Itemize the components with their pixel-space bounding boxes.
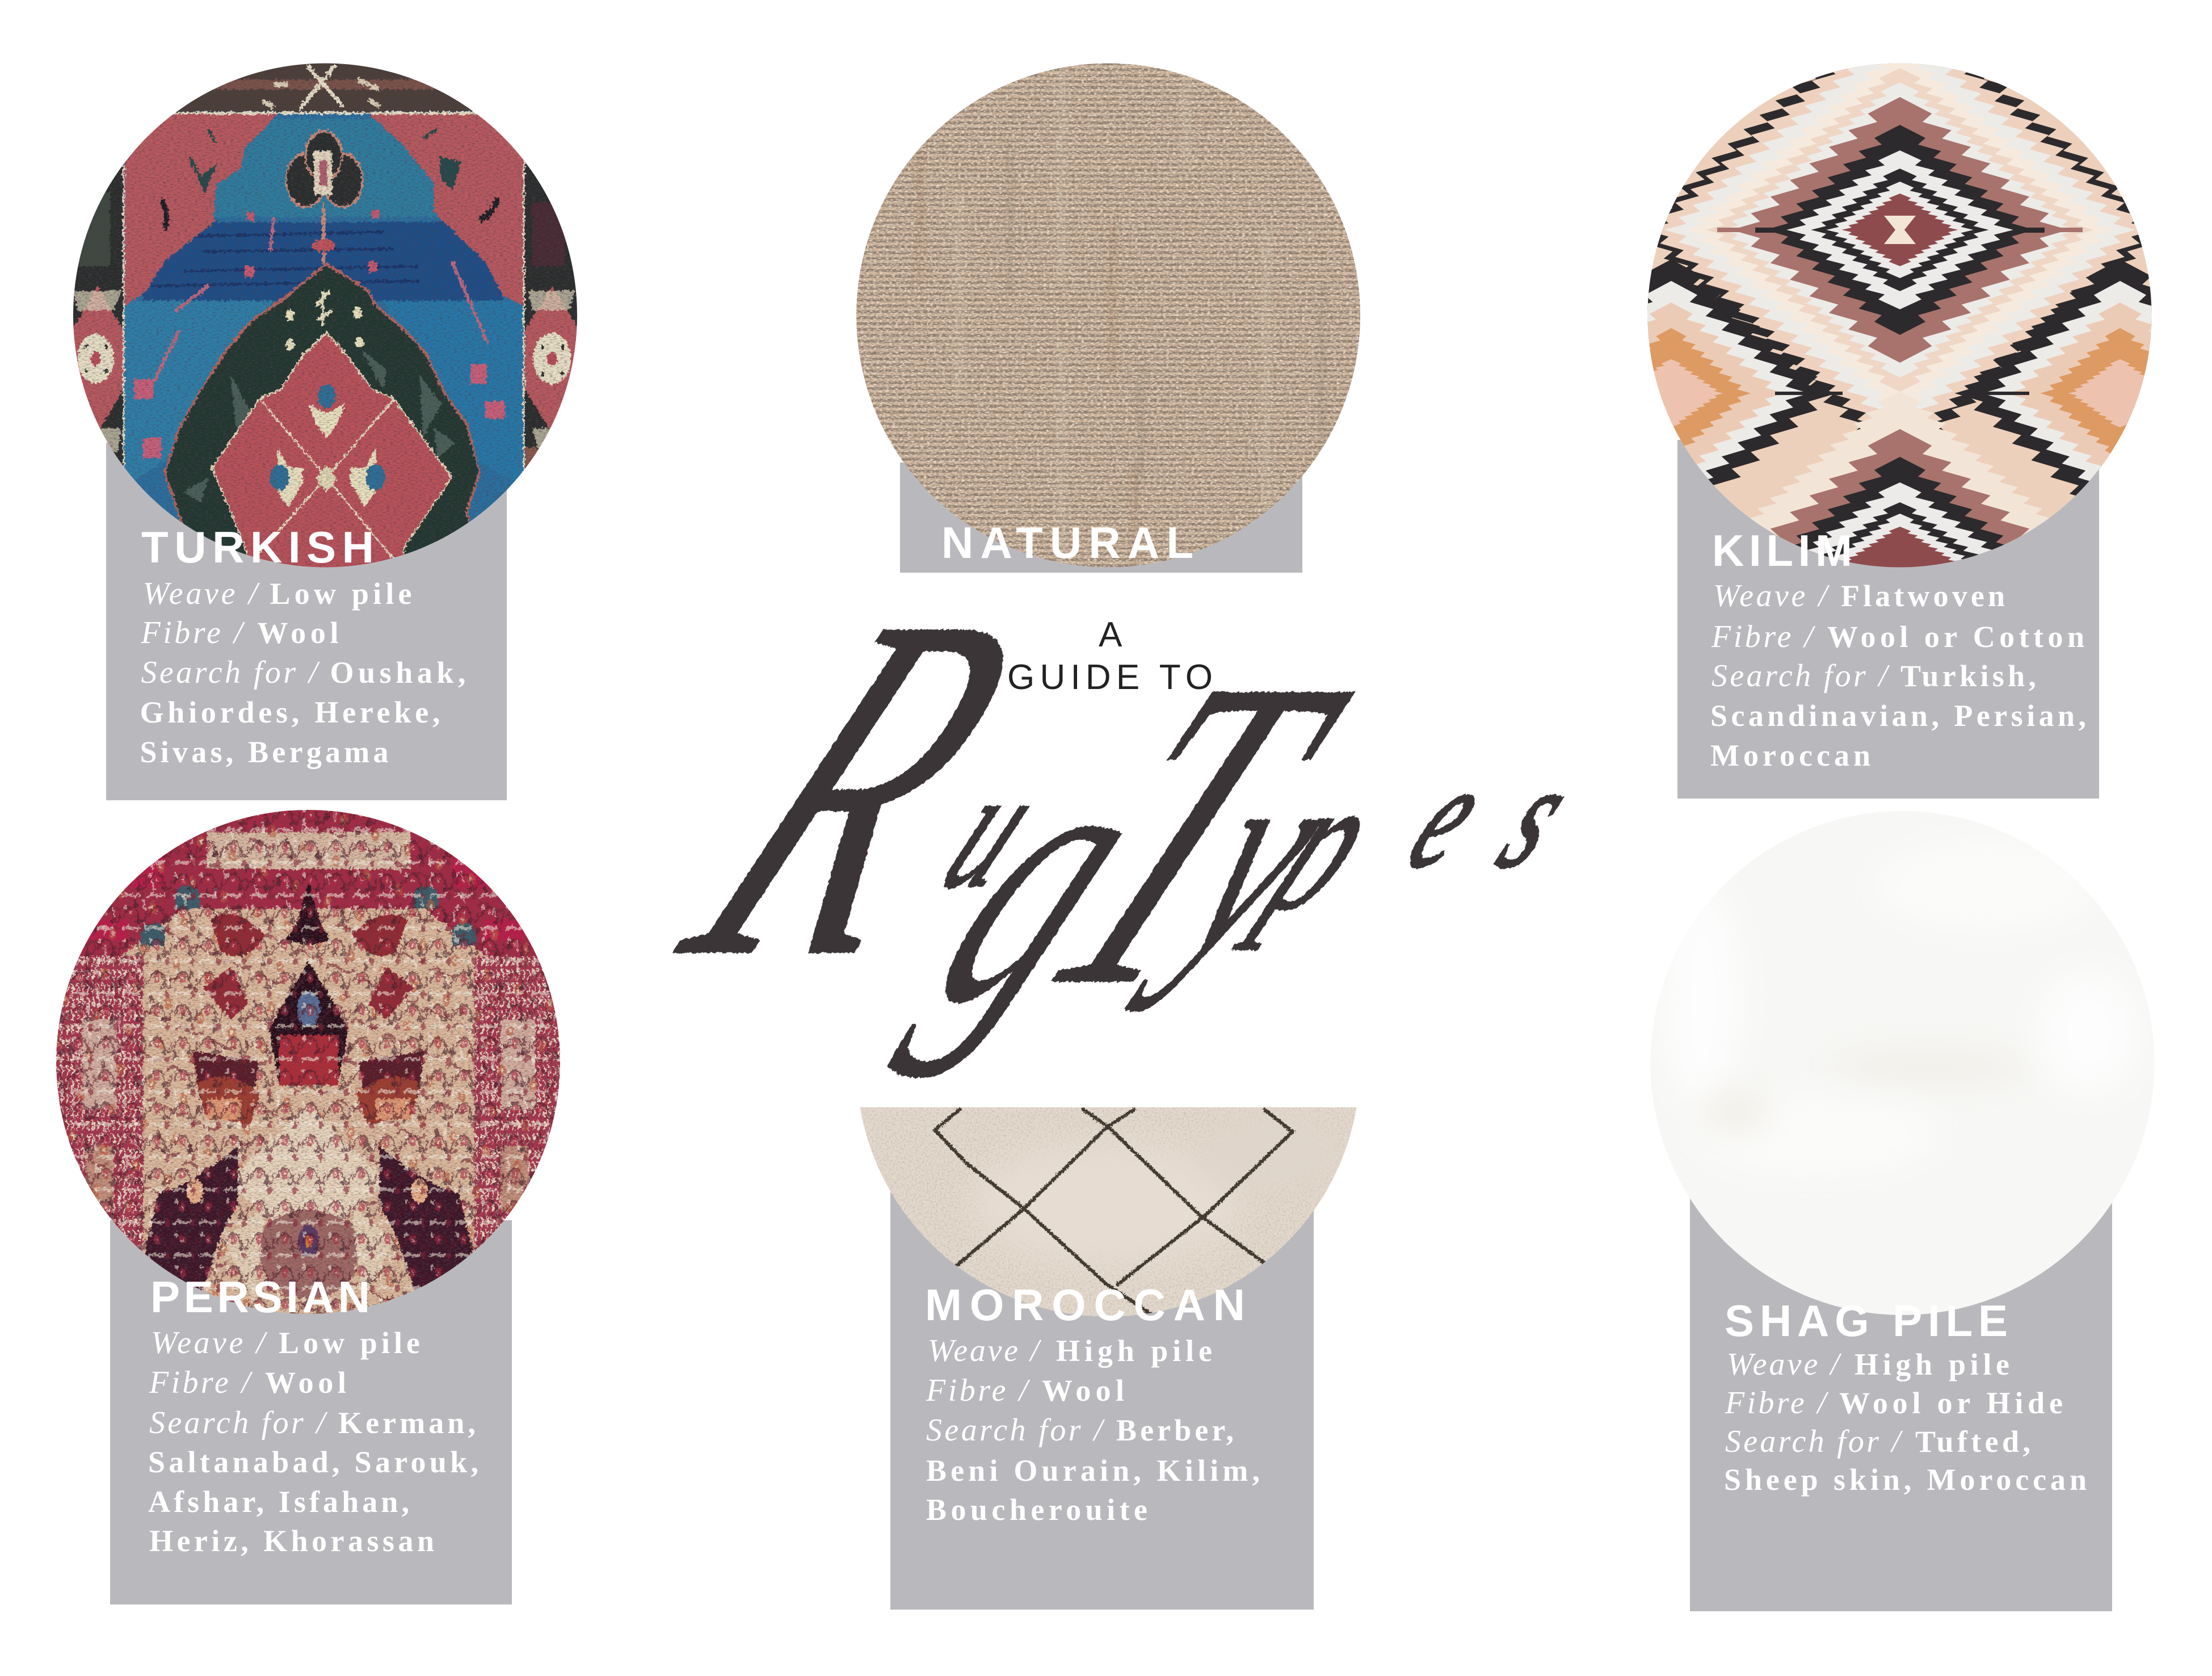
details: Shag pile: Wool or Hide (1839, 1386, 2063, 1420)
title: Rug Types script: R (610, 513, 1103, 1060)
rug image: Natural (851, 60, 1368, 570)
details: Shag pile: Search for / (1725, 1424, 1903, 1459)
main diamond core (1717, 97, 2083, 363)
bottom diamond (1697, 392, 2102, 732)
rug image: Persian (44, 803, 583, 1330)
panel: Persian (44, 803, 583, 1604)
details: Persian: Weave / (151, 1325, 267, 1360)
title: Rug Types script: p (1231, 736, 1416, 950)
info box: Natural (900, 463, 1302, 573)
details: Shag pile: High pile (1854, 1347, 2009, 1381)
panel: Moroccan (851, 1101, 1373, 1610)
title: Rug Types script: g (879, 671, 1218, 1080)
details: Persian: Heriz, Khorassan (149, 1524, 434, 1558)
rug image: Moroccan (851, 1101, 1373, 1328)
details: Persian: Saltanabad, Sarouk, (148, 1445, 478, 1479)
details: Moroccan: Weave / (928, 1333, 1041, 1368)
details: Moroccan: Beni Ourain, Kilim, (926, 1454, 1260, 1488)
rug image: Turkish (73, 64, 577, 568)
details: Persian: Search for / (149, 1405, 327, 1440)
details: Moroccan: Fibre / (926, 1373, 1030, 1408)
details: Turkish: Weave / (143, 576, 260, 611)
rug image: Kilim (1648, 64, 2152, 568)
details: Persian: Fibre / (149, 1365, 253, 1400)
heading: Moroccan: MOROCCAN (925, 1280, 1245, 1330)
title: Guide to: GUIDE TO (1007, 658, 1213, 697)
details: Shag pile (1724, 1347, 2087, 1497)
info box: Turkish (106, 443, 507, 800)
heading: Shag pile: SHAG PILE (1725, 1296, 2008, 1346)
main diamond rings (1632, 0, 2168, 460)
title: Rug Types script: T (974, 587, 1415, 1078)
details: Moroccan: Wool (1042, 1373, 1124, 1408)
details: Turkish: Sivas, Bergama (140, 735, 388, 769)
heading: Persian: PERSIAN (150, 1272, 370, 1322)
details: Kilim: Wool or Cotton (1827, 620, 2084, 654)
details: Shag pile: Tufted, (1915, 1425, 2030, 1459)
panel: Natural (851, 60, 1368, 573)
info box: Persian (110, 1220, 512, 1604)
panel: Kilim (1648, 64, 2152, 799)
details: Persian: Low pile (279, 1326, 420, 1360)
top band and corners (44, 803, 583, 977)
details: Moroccan: Berber, (1116, 1413, 1234, 1447)
title: Rug Types script: y (1121, 698, 1390, 1012)
details: Persian: Wool (265, 1366, 346, 1400)
details: Turkish: Oushak, (330, 656, 465, 690)
details: Kilim: Turkish, (1900, 659, 2036, 693)
title: Rug Types script: e (1384, 734, 1515, 898)
details: Moroccan: High pile (1056, 1334, 1212, 1368)
right diamond (1954, 259, 2212, 527)
details: Kilim: Flatwoven (1841, 579, 2005, 613)
rug image: Shag pile (1646, 806, 2162, 1322)
title: Rug Types script: u (916, 733, 1073, 922)
panel: Turkish (73, 64, 577, 800)
details: Kilim: Moroccan (1710, 738, 1870, 772)
details: Turkish: Low pile (270, 577, 412, 611)
title: Rug Types script: s (1475, 734, 1600, 898)
panel: Shag pile (1646, 806, 2162, 1611)
details: Turkish: Wool (258, 616, 338, 650)
info box: Shag pile (1690, 1198, 2112, 1611)
details: Moroccan: Boucherouite (926, 1493, 1147, 1527)
info box: Moroccan (890, 1192, 1314, 1610)
info box: Kilim (1677, 440, 2099, 799)
details: Kilim: Weave / (1713, 578, 1830, 614)
details: Persian: Kerman, (338, 1406, 476, 1440)
details: Shag pile: Weave / (1727, 1347, 1841, 1382)
heading: Natural: NATURAL (941, 518, 1193, 568)
details: Shag pile: Sheep skin, Moroccan (1724, 1463, 2087, 1497)
details: Kilim: Fibre / (1711, 619, 1815, 654)
details: Kilim (1710, 578, 2086, 772)
details: Kilim: Scandinavian, Persian, (1710, 699, 2086, 733)
details: Turkish: Fibre / (141, 615, 245, 650)
details: Persian: Afshar, Isfahan, (148, 1485, 409, 1519)
details: Turkish: Search for / (141, 655, 320, 690)
details: Moroccan (926, 1333, 1260, 1527)
heading: Turkish: TURKISH (141, 522, 374, 572)
details: Persian (148, 1325, 478, 1558)
details: Moroccan: Search for / (926, 1413, 1105, 1448)
title block (599, 513, 1722, 1080)
left diamond (1505, 259, 1837, 527)
heading: Kilim: KILIM (1712, 526, 1852, 576)
details: Kilim: Search for / (1711, 658, 1890, 694)
title: A: A (1099, 615, 1122, 654)
details: Shag pile: Fibre / (1725, 1385, 1828, 1421)
inner field motifs (286, 882, 331, 946)
details: Turkish: Ghiordes, Hereke, (140, 695, 440, 729)
details: Turkish (140, 576, 465, 769)
